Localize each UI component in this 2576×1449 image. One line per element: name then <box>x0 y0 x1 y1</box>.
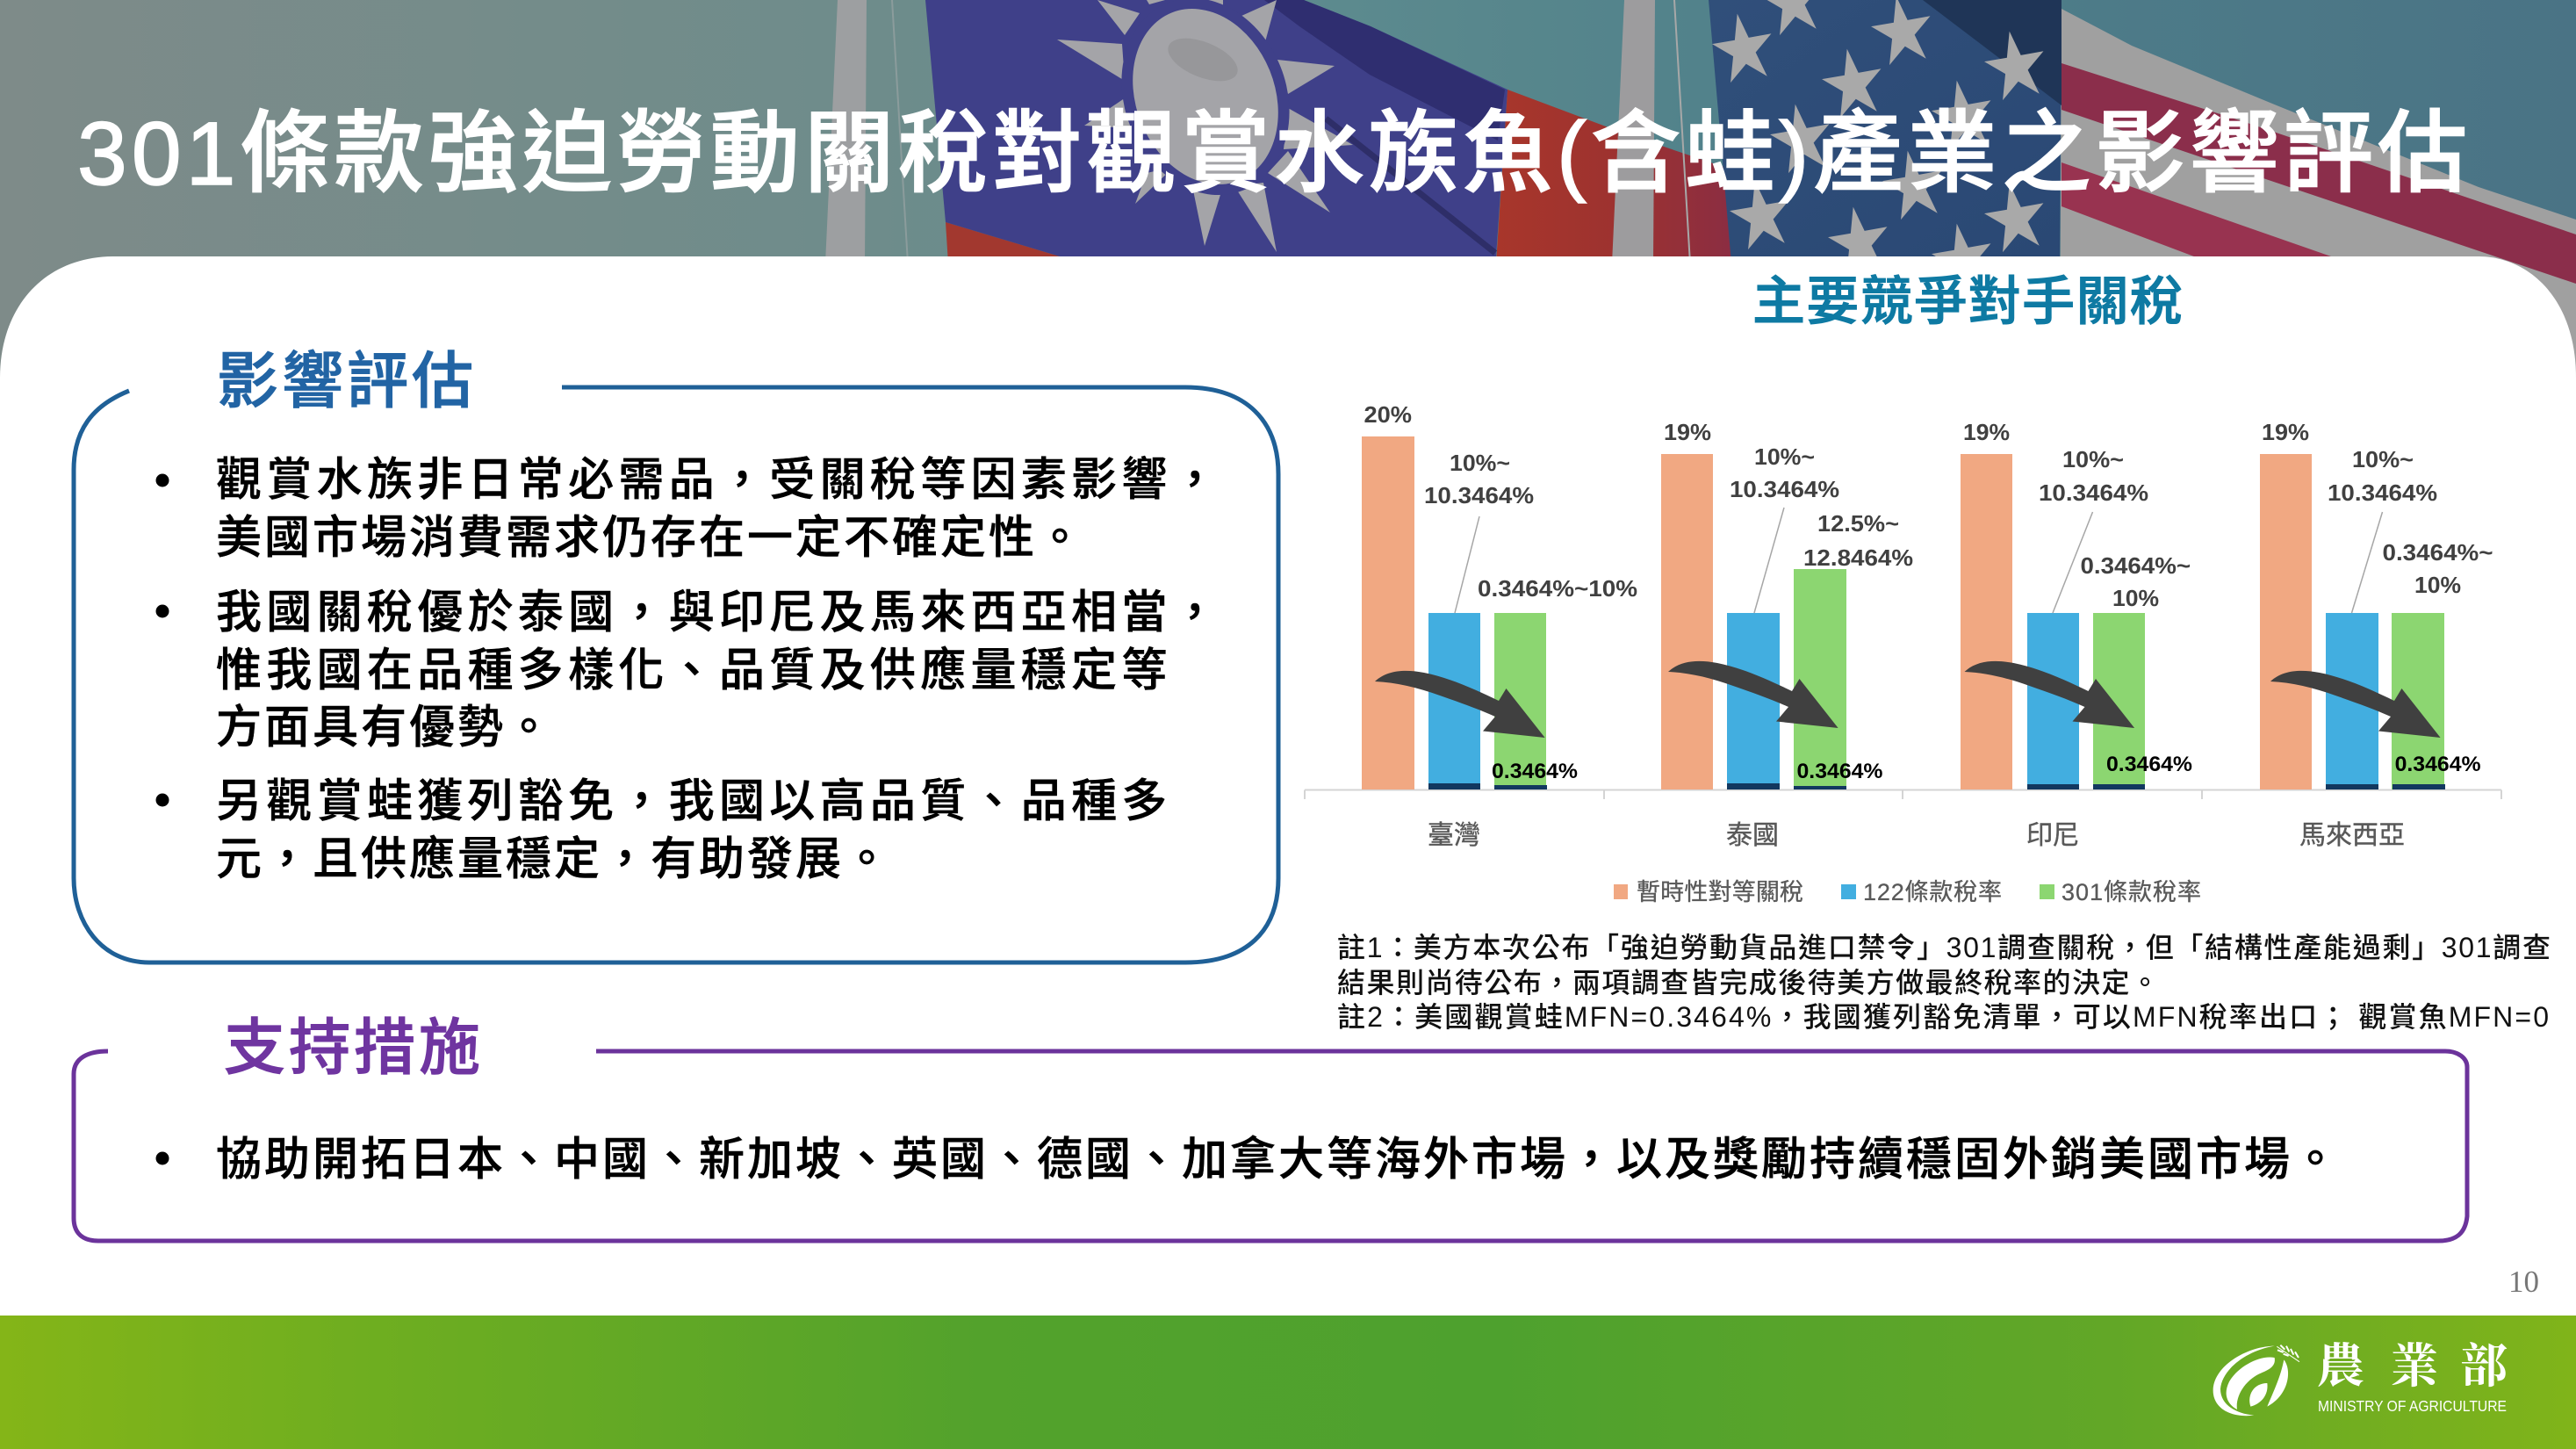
group: Thailand: 12.5%~ <box>1817 510 1899 537</box>
group: Taiwan: 0.3464% <box>1492 760 1578 783</box>
group: Taiwan: 0.3464%~10% <box>1478 575 1637 602</box>
bullet list: assessment: 另觀賞蛙獲列豁免，我國以高品質、品種多 <box>216 776 1172 827</box>
axis <box>1305 790 2501 799</box>
bullet list: assessment: 美國市場消費需求仍存在一定不確定性。 <box>216 513 1085 564</box>
group: Indonesia <box>1961 419 2192 850</box>
group: Taiwan <box>1362 401 1637 850</box>
icon: ministry emblem <box>2213 1345 2299 1416</box>
bar chart: tariffs of main competitors <box>1305 401 2501 905</box>
group: Indonesia: 10%~ <box>2062 446 2124 472</box>
group: Indonesia: 印尼 <box>2026 821 2079 850</box>
group: Indonesia: 0.3464% <box>2106 753 2192 776</box>
group: Indonesia: 19% <box>1963 419 2010 445</box>
group: Thailand: 10.3464% <box>1730 476 1839 502</box>
title: 301條款強迫勞動關稅對觀賞水族魚(含蛙)產業之影響評估 <box>77 104 2467 204</box>
group: Thailand <box>1661 419 1913 850</box>
group: Thailand: 0.3464% <box>1796 760 1882 783</box>
group: Thailand: 泰國 <box>1726 821 1779 850</box>
group: Taiwan: 臺灣 <box>1428 821 1480 850</box>
panel: impact assessment <box>74 347 1278 962</box>
legend: 301條款稅率 <box>2062 879 2201 905</box>
group: Taiwan: 10%~ <box>1450 450 1510 476</box>
bullet: support measure: 協助開拓日本、中國、新加坡、英國、德國、加拿大等海外市場，以及獎勵持續穩固外銷美國市場。 <box>216 1135 2341 1186</box>
group: Malaysia: 19% <box>2262 419 2309 445</box>
group: Malaysia: 馬來西亞 <box>2299 821 2405 850</box>
logo: Ministry of Agriculture: 業 <box>2391 1329 2444 1396</box>
bullet list: assessment: 我國關稅優於泰國，與印尼及馬來西亞相當， <box>216 588 1222 638</box>
footnotes: 註2：美國觀賞蛙MFN=0.3464%，我國獲列豁免清單，可以MFN稅率出口； 觀賞魚MFN=0 <box>1337 1001 2549 1033</box>
flagpole right <box>1612 0 1655 263</box>
flag of USA <box>1708 0 2576 386</box>
logo: Ministry of Agriculture: 部 <box>2460 1329 2508 1396</box>
bullet list: assessment: 方面具有優勢。 <box>216 703 554 753</box>
footer green band <box>0 1316 2576 1449</box>
footnotes: 註1：美方本次公布「強迫勞動貨品進口禁令」301調查關稅，但「結構性產能過剩」301調查 <box>1337 932 2551 963</box>
heading: impact assessment: 影響評估 <box>217 347 473 415</box>
group: Thailand: 10%~ <box>1754 443 1815 470</box>
group: Thailand: 12.8464% <box>1803 544 1913 571</box>
group: Malaysia: 10% <box>2414 572 2461 598</box>
group: Malaysia <box>2260 419 2493 850</box>
group: Malaysia: 0.3464%~ <box>2383 539 2493 566</box>
bullet list: assessment: 元，且供應量穩定，有助發展。 <box>216 834 892 885</box>
page number: 10 <box>2508 1265 2539 1299</box>
legend <box>1614 879 2201 905</box>
group: Indonesia: 0.3464%~ <box>2081 552 2191 579</box>
group: Malaysia: 10%~ <box>2352 446 2414 472</box>
group: Malaysia: 0.3464% <box>2395 753 2481 776</box>
legend: 暫時性對等關稅 <box>1637 879 1803 905</box>
group: Indonesia: 10% <box>2112 585 2159 611</box>
logo: Ministry of Agriculture <box>2213 1329 2508 1416</box>
white content panel <box>0 256 2576 1317</box>
bullet list: assessment: 惟我國在品種多樣化、品質及供應量穩定等 <box>216 645 1172 696</box>
flagpole left <box>825 0 867 263</box>
heading: support measures: 支持措施 <box>224 1013 480 1082</box>
panel: support measures <box>74 1013 2467 1241</box>
ministry name: 農 <box>2317 1329 2364 1396</box>
group: Indonesia: 10.3464% <box>2039 479 2148 506</box>
background photo: flags of Taiwan and USA <box>0 0 2576 386</box>
group: Thailand: 19% <box>1664 419 1711 445</box>
footnotes <box>1337 932 2551 1033</box>
logo: Ministry of Agriculture: MINISTRY OF AGRICULTURE <box>2318 1397 2507 1415</box>
footnotes: 結果則尚待公布，兩項調查皆完成後待美方做最終稅率的決定。 <box>1337 967 2159 998</box>
chart title: 主要競爭對手關稅 <box>1752 272 2183 331</box>
bullet list: assessment: 觀賞水族非日常必需品，受關稅等因素影響， <box>216 455 1222 506</box>
group: Taiwan: 20% <box>1364 401 1412 428</box>
bullet list: assessment <box>156 455 1222 885</box>
group: Taiwan: 10.3464% <box>1424 482 1534 508</box>
legend: 122條款稅率 <box>1863 879 2002 905</box>
flag of Taiwan <box>925 0 1731 263</box>
group: Malaysia: 10.3464% <box>2328 479 2437 506</box>
